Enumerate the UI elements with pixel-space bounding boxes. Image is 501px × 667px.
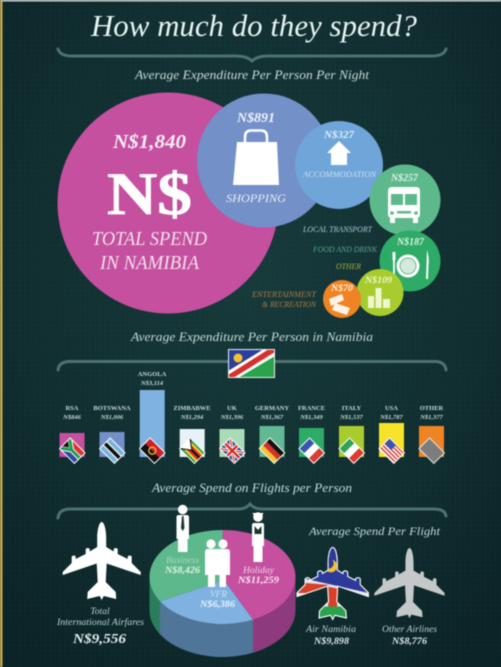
bubble: entertainment: N$70: [330, 283, 353, 294]
labels for bubbles: [251, 225, 378, 309]
text: airline values: Other Airlines: [382, 625, 437, 635]
bar: Other: OTHER: [420, 405, 444, 412]
bar: Germany: N$1,367: [260, 414, 284, 421]
text: airline values: [305, 625, 437, 646]
icon: business person: [176, 505, 189, 552]
bar: USA: USA: [385, 405, 398, 412]
bar: Botswana: [93, 405, 131, 464]
bubble: total spend: N$: [107, 161, 192, 227]
text: airline values: N$8,776: [391, 636, 428, 646]
pie labels: [164, 555, 279, 609]
bar: France: FRANCE: [298, 405, 325, 412]
flag: Namibia: [228, 349, 275, 378]
icon: total airfares plane: [63, 522, 141, 600]
labels for bubbles: LOCAL TRANSPORT: [302, 225, 373, 234]
icon: holiday person: [252, 512, 264, 562]
bar: Angola: N$3,114: [140, 380, 164, 387]
pie labels: Holiday: [242, 566, 275, 576]
bar: Zimbabwe: ZIMBABWE: [173, 405, 211, 412]
section brace left and right: [58, 362, 446, 370]
bar: Zimbabwe: N$1,294: [180, 414, 204, 421]
bar: Italy: ITALY: [342, 405, 362, 412]
bubble: total spend: TOTAL SPEND: [92, 229, 207, 250]
bar: USA: N$1,787: [379, 414, 404, 421]
bubble: total spend: IN NAMIBIA: [99, 253, 199, 274]
icon: coin stacks: [368, 288, 390, 308]
bar: RSA: [59, 405, 86, 464]
bubble: accommodation: ACCOMMODATION: [302, 169, 377, 179]
bar: Angola: ANGOLA: [138, 371, 167, 378]
labels for bubbles: FOOD AND DRINK: [312, 245, 378, 254]
bar: RSA: RSA: [65, 405, 79, 412]
icon: tickets: [329, 294, 350, 315]
bubble: other: [356, 269, 404, 316]
icon: Air Namibia plane: [297, 548, 369, 620]
bubble: entertainment: [323, 280, 361, 318]
icon: other airlines plane: [374, 548, 445, 618]
title: How much do they spend?: [90, 8, 417, 43]
labels for bubbles: OTHER: [336, 262, 361, 271]
text: total international airfares: [56, 607, 144, 647]
bubble: shopping: N$891: [236, 111, 275, 126]
heading: per flight: Average Spend Per Flight: [308, 524, 441, 538]
icon: house: [327, 141, 351, 165]
heading: per night: Average Expenditure Per Person Per Night: [134, 68, 370, 82]
text: total international airfares: Total: [90, 607, 110, 617]
bubble: food and drink: N$187: [396, 237, 425, 248]
pie labels: N$11,259: [237, 575, 279, 586]
bar: UK: [219, 405, 246, 464]
bubble: food and drink: [380, 230, 440, 292]
icon: bus: [388, 187, 420, 223]
bar: Germany: GERMANY: [255, 405, 289, 412]
bar: USA: [378, 405, 405, 464]
text: airline values: N$9,898: [313, 636, 350, 646]
bar: Italy: [338, 405, 365, 464]
bar: Botswana: N$1,006: [100, 414, 124, 421]
pie labels: Business: [166, 555, 200, 565]
bubble: shopping: SHOPPING: [226, 191, 286, 205]
bar chart: spend by country: [59, 371, 444, 464]
bubble: other: N$109: [364, 275, 392, 286]
pie labels: N$8,426: [164, 565, 201, 575]
slice: VFR: [160, 580, 253, 624]
icon: shopping bag: [233, 130, 279, 185]
bubble: total spend: [58, 92, 278, 314]
text: airline values: Air Namibia: [305, 625, 356, 635]
heading: per person: Average Expenditure Per Person in Namibia: [130, 329, 374, 344]
bar: UK: UK: [227, 405, 237, 412]
bar: Zimbabwe: [173, 405, 211, 464]
bar: Germany: [255, 405, 289, 464]
text: total international airfares: International Airfares: [56, 617, 144, 628]
bubble: local transport: N$257: [390, 173, 419, 184]
bar: Botswana: BOTSWANA: [93, 405, 131, 412]
pie labels: N$6,386: [199, 599, 236, 609]
heading: flights: Average Spend on Flights per Person: [151, 480, 352, 495]
text: total international airfares: N$9,556: [72, 632, 126, 647]
bar: France: [298, 405, 325, 464]
bar: RSA: N$846: [62, 414, 82, 421]
bar: Angola: [138, 371, 167, 464]
pie chart: flights by purpose: [149, 505, 296, 657]
icon: couple: [205, 539, 230, 587]
pie labels: VFR: [210, 589, 228, 599]
bar: Other: [419, 405, 444, 463]
panel: expenditure per night bubbles: [58, 92, 440, 318]
bubble: local transport: [370, 164, 440, 236]
icon: plate and cutlery: [392, 250, 429, 279]
title brace: [58, 49, 446, 61]
bubble: shopping: [197, 94, 331, 228]
bar: Italy: N$1,537: [339, 414, 364, 421]
slice: business: [149, 530, 224, 601]
labels for bubbles: & RECREATION: [262, 300, 317, 309]
labels for bubbles: ENTERTAINMENT: [251, 290, 317, 299]
flights brace: [58, 504, 446, 518]
bubble: total spend: N$1,840: [112, 131, 186, 153]
bubble: accommodation: [295, 121, 383, 209]
bubble: accommodation: N$327: [323, 129, 354, 141]
slice: holiday: [222, 530, 295, 620]
bar: France: N$1,349: [299, 414, 324, 421]
bar: Other: N$1,377: [419, 414, 444, 421]
bar: UK: N$1,396: [220, 414, 244, 421]
pie sides: [150, 577, 296, 657]
